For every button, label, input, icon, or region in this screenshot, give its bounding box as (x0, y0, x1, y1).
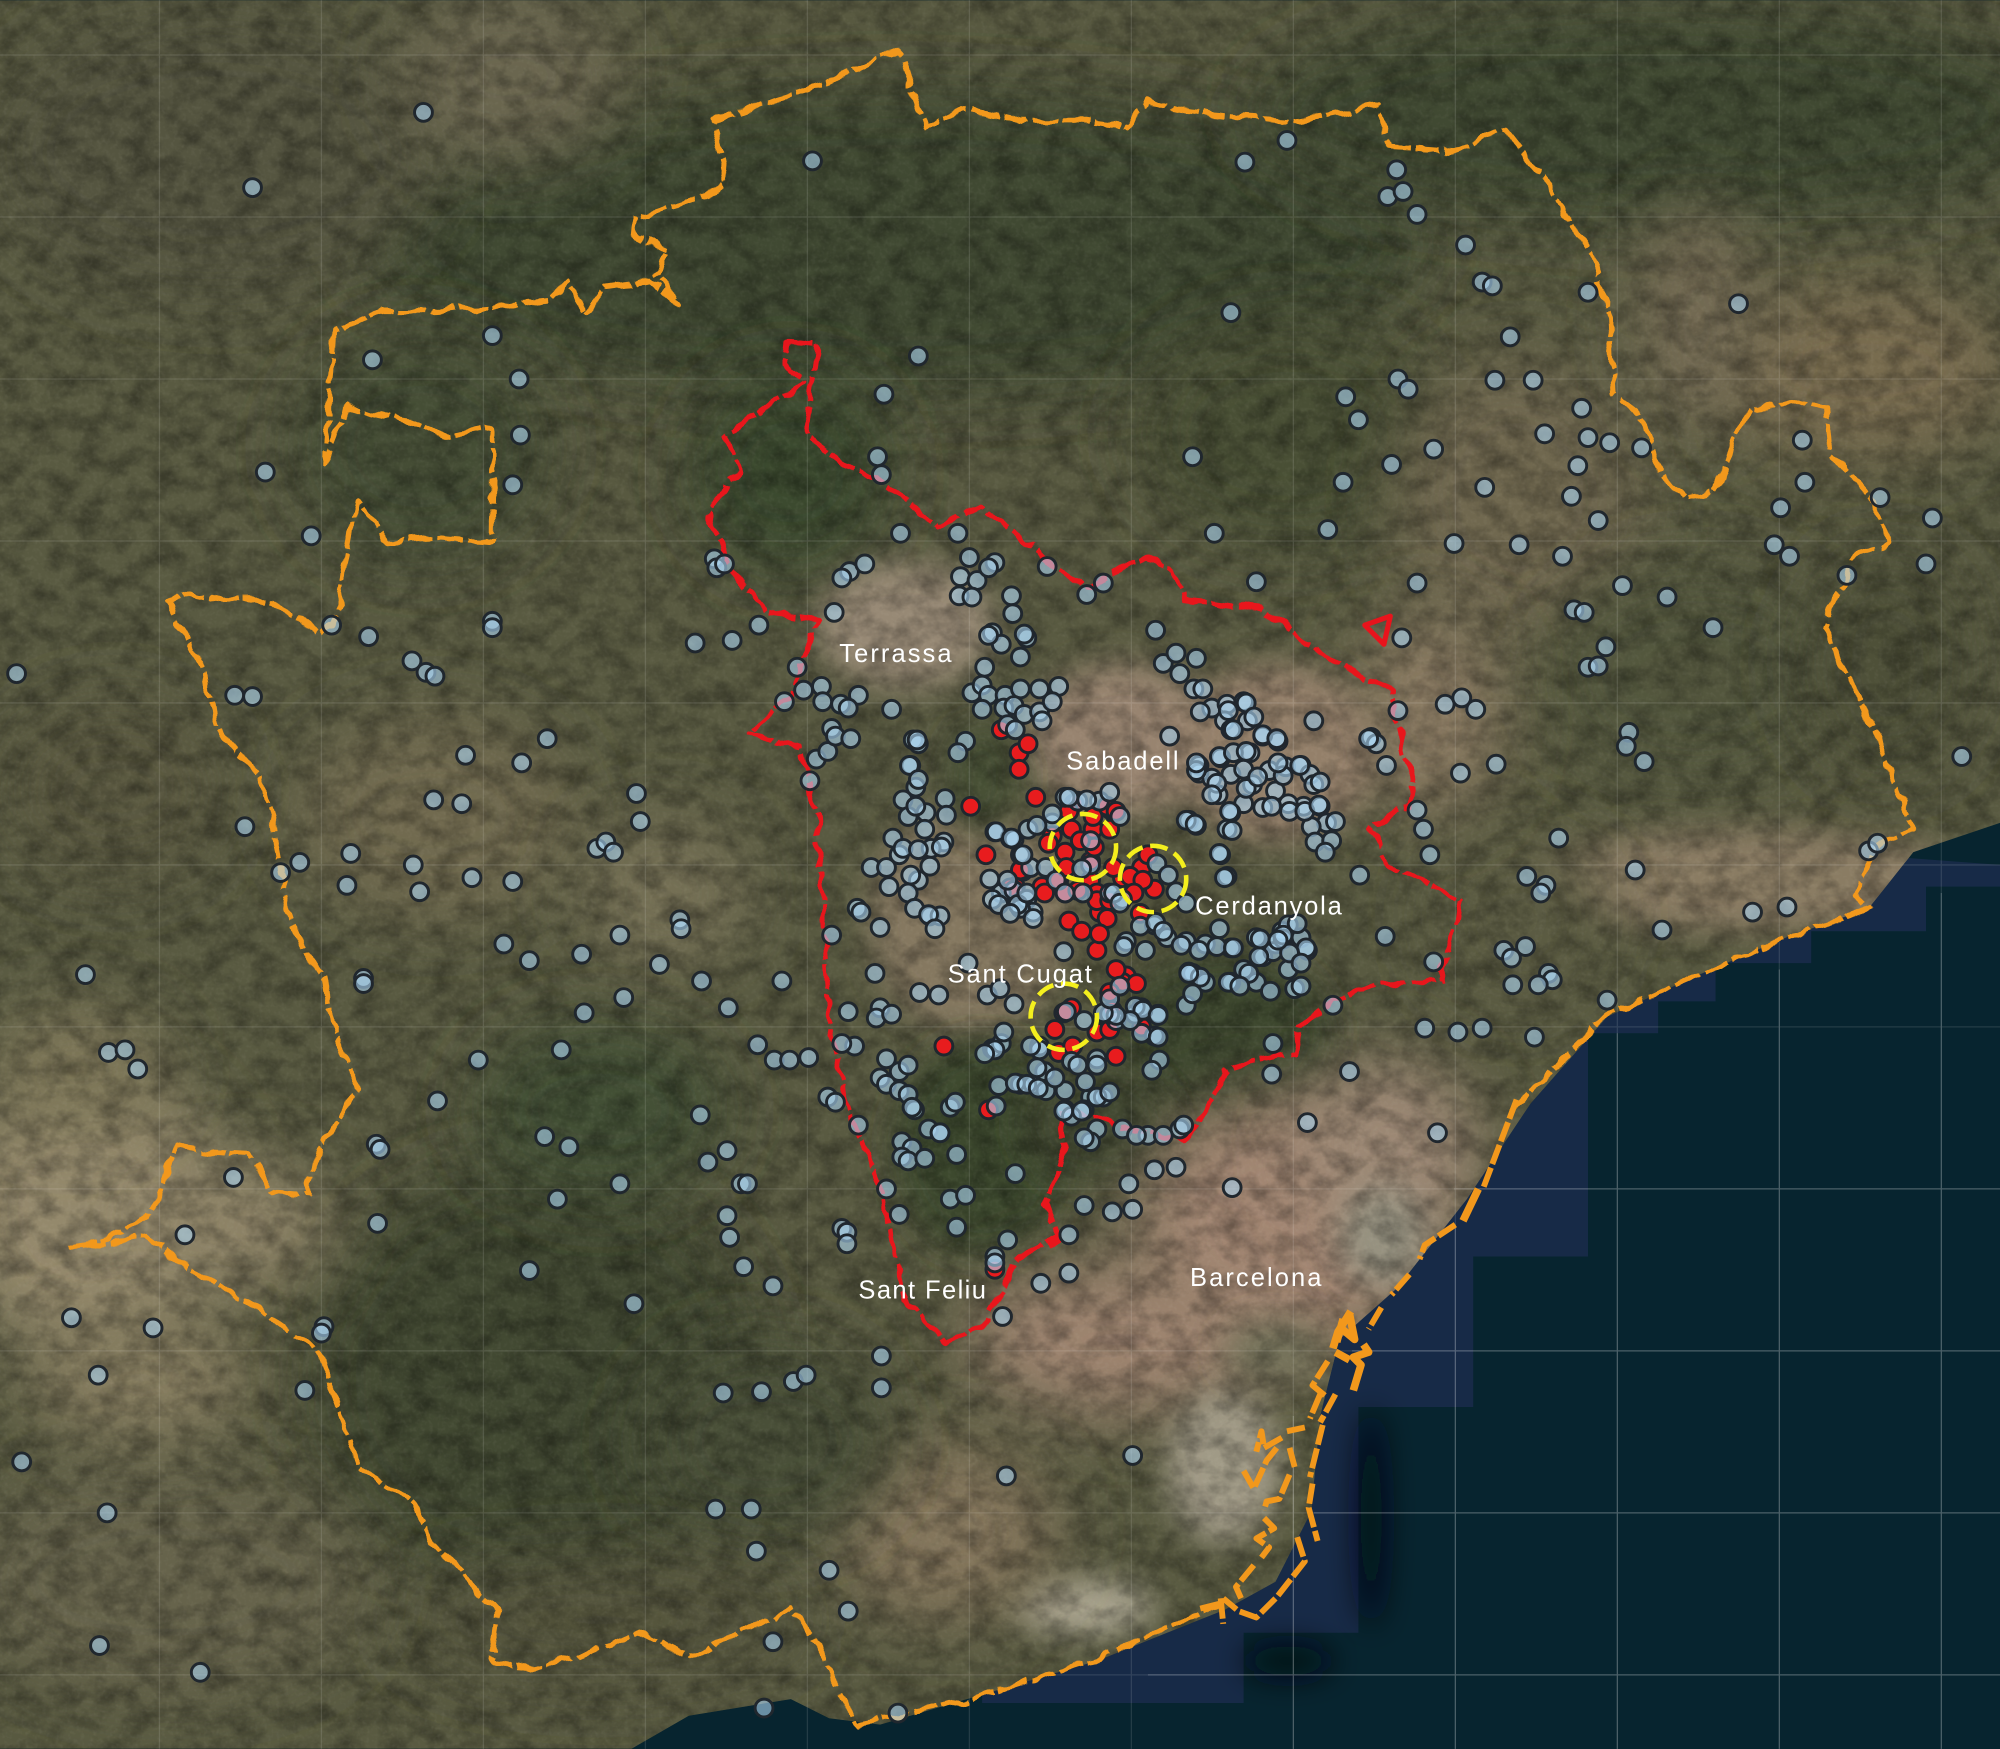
city labels: Sant Feliu (858, 1277, 986, 1305)
city labels: Sant Cugat (948, 960, 1092, 988)
city labels: Cerdanyola (1195, 893, 1343, 921)
city labels: Sabadell (1066, 747, 1179, 775)
highlighted clusters: yellow dashed circles (1031, 814, 1186, 1050)
city labels: Barcelona (1190, 1264, 1322, 1292)
coastal imagery tiles (982, 829, 2000, 1703)
city labels: Terrassa (839, 640, 952, 668)
red monitoring points (935, 721, 1163, 1278)
city labels (839, 640, 1343, 1305)
inner boundary: red dashed line (708, 342, 1460, 1342)
